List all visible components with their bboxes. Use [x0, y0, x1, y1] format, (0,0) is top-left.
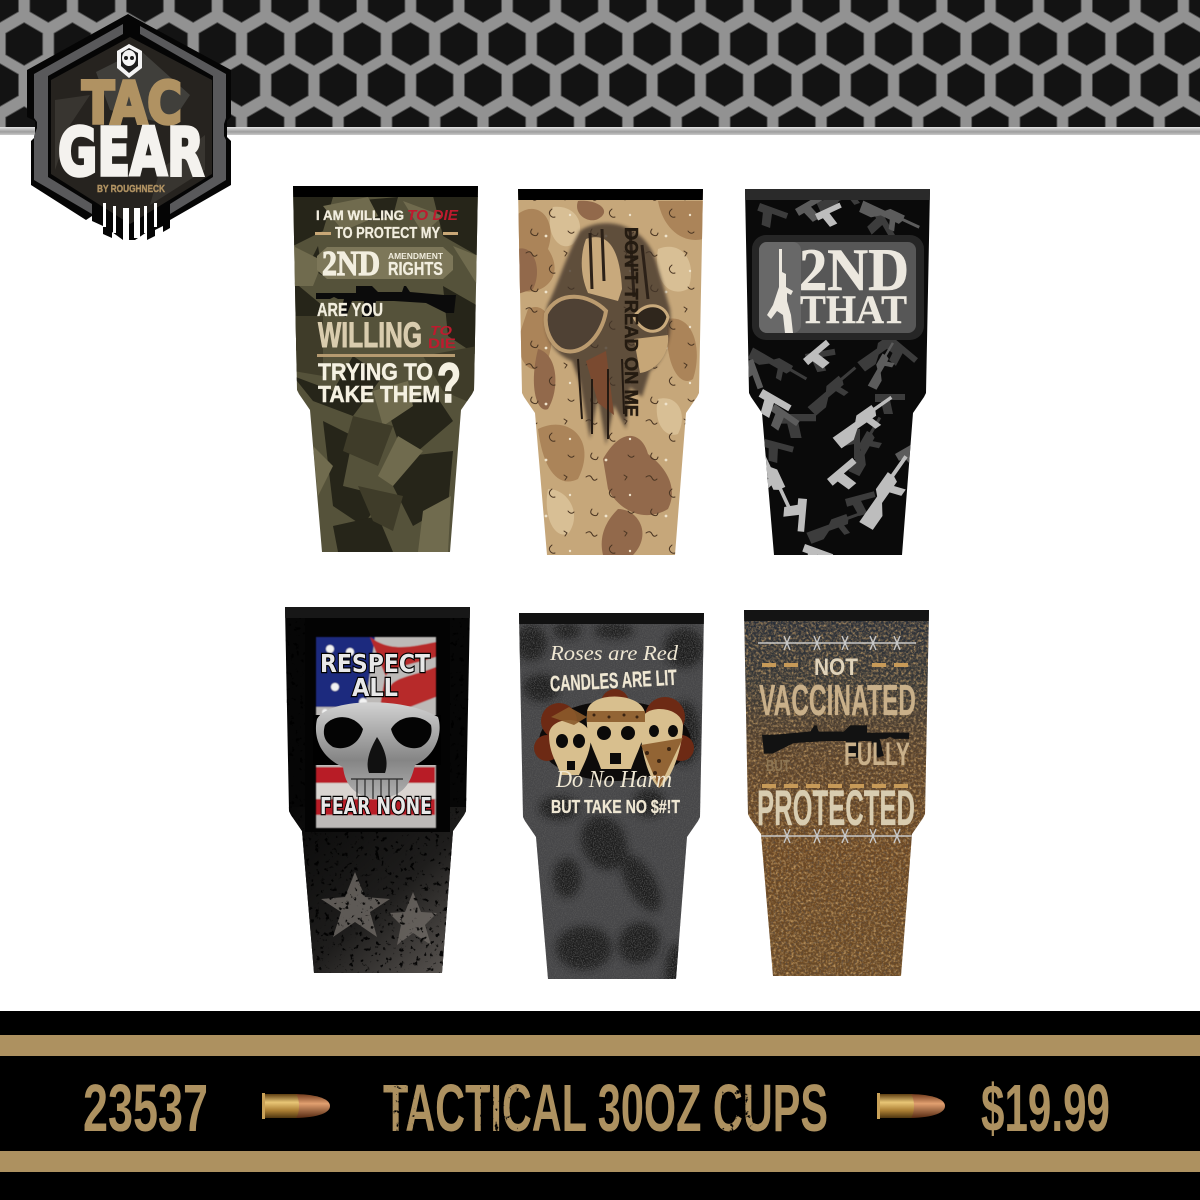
- cup 6 fully text: BUT: [766, 758, 790, 775]
- cup 5: gray leopard, roses are red skulls: [515, 613, 704, 1003]
- cup 1 question lines: ARE YOU: [317, 300, 383, 320]
- cup 1 question lines: TAKE THEM: [318, 381, 440, 407]
- cup 5 three skulls art: [534, 689, 694, 788]
- cup 3: gun camo, 2nd that: [745, 189, 930, 555]
- cup 1 question lines: WILLING: [318, 316, 422, 355]
- cup 6 protected text: PROTECTED: [757, 780, 915, 836]
- cup 1 question lines: ?: [437, 351, 461, 414]
- cup 5 top lines: Roses are Red: [549, 641, 679, 665]
- cup 1 question lines: TRYING TO: [318, 359, 433, 386]
- cup 1 headline: [315, 210, 458, 238]
- cup 3 patch: 2ND: [799, 237, 909, 303]
- cup 3 patch: THAT: [800, 287, 907, 332]
- cup 4 respect all: RESPECT: [320, 649, 430, 678]
- header metal honeycomb band: [0, 0, 1200, 135]
- logo: skull emblem: [117, 44, 142, 78]
- cup 5 top lines: CANDLES ARE LIT: [549, 665, 678, 696]
- logo: bottom teeth: [103, 203, 157, 240]
- cup 4 skull: [313, 702, 441, 799]
- cup 1 2nd amendment badge: AMENDMENT: [388, 252, 443, 261]
- logo: by Roughneck: BY ROUGHNECK: [97, 184, 166, 195]
- cup 5 bottom lines: Do No Harm: [555, 767, 672, 793]
- cup 6 not vaccinated text: NOT: [814, 654, 858, 681]
- cup 4: respect all fear none skull: [285, 607, 470, 973]
- footer: price: $19.99: [981, 1071, 1110, 1146]
- footer: product title: TACTICAL 30OZ CUPS: [383, 1071, 828, 1146]
- cup 6: rust, not vaccinated: [744, 610, 929, 976]
- footer: distressed specks on title: [385, 1080, 415, 1134]
- cup 3 patch rifle: [767, 249, 793, 333]
- footer band: [0, 1011, 1200, 1200]
- cup 6 not vaccinated text: [759, 658, 915, 716]
- cup 4 faded stars: [321, 872, 437, 945]
- cup 2 punisher skull: [545, 223, 671, 445]
- cup 4 respect all: ALL: [352, 673, 398, 702]
- cup 1 2nd amendment badge: RIGHTS: [388, 259, 443, 279]
- cup 1 2nd amendment badge: 2ND: [322, 244, 380, 283]
- cup 6 rifle: [762, 725, 909, 758]
- cup 5 top lines: [550, 645, 678, 692]
- cup 1 headline: I AM WILLING: [316, 207, 404, 223]
- cup 6 barbed wire top: [758, 636, 916, 650]
- cup 6 barbed wire bottom: [758, 829, 916, 843]
- footer: bullet icon left: [262, 1093, 330, 1119]
- logo: Tac Gear badge: [27, 14, 231, 240]
- cup 1 question lines: DIE: [428, 335, 456, 351]
- cup 1 2nd amendment badge: [317, 247, 453, 279]
- cup 2 vertical slogan: DON'T TREAD ON ME: [621, 227, 641, 417]
- cup 1 rifle: [316, 286, 456, 317]
- cup 1 question lines: [317, 302, 460, 403]
- cup 6 not vaccinated text: VACCINATED: [759, 676, 916, 725]
- cup 1 headline: TO DIE: [407, 208, 459, 224]
- cup 6 fully text: [762, 742, 910, 788]
- cup 4 american flag panel: [316, 637, 436, 828]
- cup 5 bottom lines: [552, 771, 680, 815]
- cup 3 patch: [752, 235, 924, 340]
- footer: item number: 23537: [83, 1071, 208, 1146]
- cup 4 respect all: [320, 652, 431, 698]
- footer: distressed specks on cups word: [722, 1080, 762, 1134]
- cup 6 fully text: FULLY: [844, 736, 910, 772]
- logo: GEAR wordmark: GEAR: [58, 114, 204, 191]
- cup 1 headline: TO PROTECT MY: [335, 225, 441, 242]
- footer: distressed specks on title middle: [480, 1080, 520, 1134]
- logo: TAC wordmark: TAC: [82, 69, 182, 137]
- cup 2: desert camo, punisher skull: [518, 189, 703, 555]
- footer: bullet icon right: [877, 1093, 945, 1119]
- cup 1: green camo, 2nd amendment: [293, 186, 478, 552]
- cup 5 bottom lines: BUT TAKE NO $#!T: [551, 797, 680, 817]
- cup 4 fear none: FEAR NONE: [320, 794, 432, 820]
- cup 1 question lines: TO: [430, 323, 452, 338]
